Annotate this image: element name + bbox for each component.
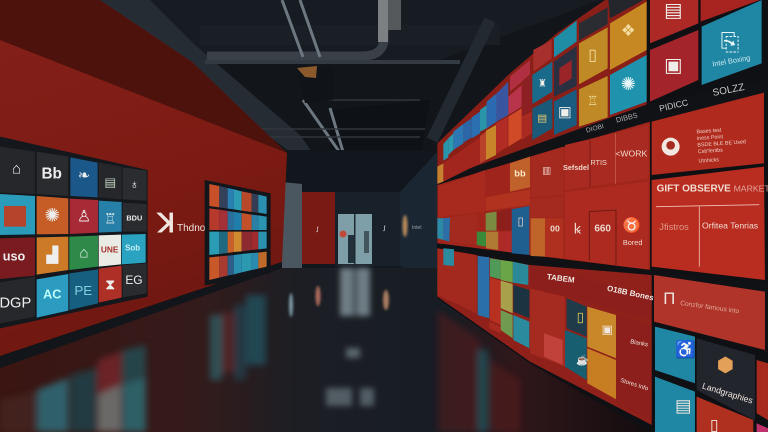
label: row 4 text: PE [74,283,92,298]
lower tile labels: TABEM [546,272,575,285]
dark navy back wall [335,192,401,266]
upper tile icons: ▤ [664,1,682,22]
panel heading: GIFT OBSERVE MARKET [657,184,768,195]
beam: truss [215,100,425,179]
info text block: Csb'feritbs [698,148,723,155]
upper tile icons: ♜ [538,79,547,90]
icon: badge circle [662,138,680,156]
upper tiles [437,0,762,184]
label: row 2 text [45,205,142,226]
label: row 4 text: DGP [0,295,31,311]
wall lamp [402,215,408,237]
band three [437,243,768,293]
right wall [437,0,768,432]
middle tile labels [514,149,648,247]
beam: cross pipe [205,60,460,64]
lower tile labels: Π [663,289,675,308]
panel labels: Orfitea Tenrias [702,220,759,230]
label: row 1 text: ▤ [104,176,116,190]
duct: large left [95,0,312,152]
label: row 3 text: UNE [101,245,119,255]
duct: horizontal pipe [207,0,384,56]
band label row: DIOBI [585,123,605,135]
info text block [696,126,747,165]
lower tile labels: O18B Bones [606,284,655,303]
label: row 4 text: ⧗ [105,277,115,293]
label: row 1 text: ♁ [130,177,139,191]
middle tile labels: <WORK [615,149,648,159]
middle tile labels: ꝃ [574,220,582,236]
label: row 2 text: BDU [126,214,142,223]
second wall panel [205,180,271,286]
lower tile labels: Conzfor famous into [680,300,740,315]
middle tiles [437,125,648,270]
floor reflection: left panel [0,345,146,432]
upper tile icons: ⎘ [721,29,739,55]
lower tile labels: Landgraphies [701,381,755,406]
upper tile icons: ▣ [664,56,682,77]
row 2 tiles [0,194,147,235]
bracket: orange [297,66,317,78]
lower tile labels: ▤ [675,396,691,416]
left display panel [0,137,148,328]
lower tile labels: ♿ [675,339,696,359]
floor glints [289,286,389,317]
band label row: DIBBS [615,111,639,125]
centre logo and label: ꓘ [156,208,175,238]
label: row 2 text: ♖ [104,210,117,226]
band label row [437,80,768,185]
middle tile labels: Sefsdel [563,163,589,172]
side dark wall [400,152,437,282]
label: row 3 text: Sob [125,244,140,253]
light tube [345,161,369,163]
info text block: BSDE BLE BE Used [697,139,746,149]
panel labels [659,220,759,232]
back wall signs: Intel [412,225,421,231]
beam: light rails [282,0,344,157]
middle tile labels: 660 [594,224,611,235]
back wall [275,150,445,282]
upper tile icons [537,1,751,125]
black baseboard [0,262,282,368]
back wall signs: ꭍ [383,225,386,233]
label: row 4 text: EG [125,273,143,287]
grey column [282,182,302,272]
label: row 1 text: Bb [41,165,62,182]
upper tile icons: ✺ [621,74,636,94]
label: row 4 text [0,273,143,311]
lower tile labels: Stores Info [619,378,649,393]
upper tile icons: ▯ [588,47,597,64]
lower tile labels [546,272,755,432]
panel labels: Jfistros [659,222,689,232]
label: row 4 text: AC [43,287,61,301]
lamp on left wall [276,216,282,232]
divider lines [656,205,759,267]
middle tile labels: ▥ [542,165,551,175]
label: row 1 text: ❧ [78,168,90,184]
middle tile labels: ♉ [623,216,641,234]
label: row 3 text [3,244,140,264]
row 1 tiles [0,147,147,201]
label: row 3 text: ⌂ [79,244,89,261]
upper tile icons: Intel Boxing [712,53,751,69]
upper tile icons: ▣ [558,105,572,121]
info text block: Utnhicks [698,157,720,165]
floor reflection: doorway [326,268,374,406]
label: row 1 text: ⌂ [12,160,21,177]
label: row 2 text: ♙ [77,209,91,226]
middle tile labels: Bored [623,238,642,247]
upper shadow band [0,0,287,153]
centre logo and label [156,208,206,238]
spotlights [342,180,376,190]
duct: dark junction [297,66,333,103]
floor reflection: right wall [438,310,520,432]
info text block: iness Point [697,134,724,142]
ceiling [0,0,768,200]
label: row 1 text [12,160,139,191]
band label row: SOLZZ [712,82,745,99]
lower tile labels: Blanks [630,339,648,348]
back wall signs: ꭍ [316,226,319,234]
left red wall [0,0,287,368]
upper tile icons: ▤ [537,113,547,125]
upper tile icons: ❖ [621,21,636,40]
row 3 tiles [0,234,146,279]
lower tile labels: ⬢ [717,355,734,377]
label: row 3 text: ▟ [45,245,58,264]
label: row 2 text: ✺ [45,205,60,226]
centre logo and label: Thdno [177,223,206,234]
label: row 3 text: uso [3,250,26,264]
lower tiles [437,248,768,432]
lower tile labels: ☕ [576,353,588,366]
floor reflection: second panel [210,295,266,380]
middle tile labels: RTIS [590,158,607,167]
info text block: Bases test [696,128,722,135]
duct: pale vertical pipe [378,0,388,42]
row 4 tiles [0,263,147,323]
lower tile labels: ▯ [577,310,584,325]
middle tile labels: ▯ [518,216,524,228]
middle tile labels: 00 [550,224,560,234]
floor [0,268,660,432]
middle tile labels: bb [514,169,526,179]
lit doorway [338,214,372,264]
back wall signs [316,225,421,234]
red back panel [302,192,335,264]
thumbnail image [4,206,26,227]
duct: right dark [432,20,490,140]
lower tile labels: ▣ [602,322,613,336]
big red info panels [652,93,768,280]
upper tile icons: ♖ [587,94,598,108]
band label row: PIDICC [658,97,689,114]
